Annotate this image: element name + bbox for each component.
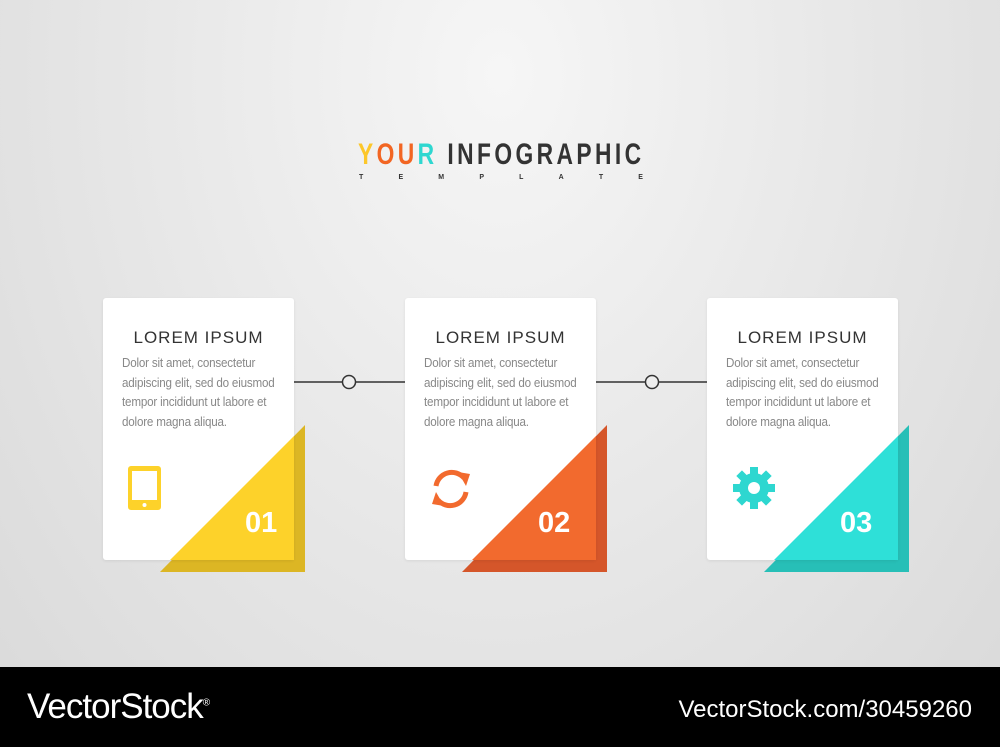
number 02: 02 bbox=[538, 507, 570, 539]
panel: 01: Dolor sit amet, consectetur bbox=[122, 356, 255, 370]
panel: 02: tempor incididunt ut labore et bbox=[424, 395, 568, 409]
number 03: 03 bbox=[840, 507, 872, 539]
subtitle: A bbox=[559, 174, 564, 181]
panel: 02: dolore magna aliqua. bbox=[424, 414, 529, 428]
panel: 02: Dolor sit amet, consectetur bbox=[424, 356, 557, 370]
footer: VectorStock.com/30459260 bbox=[678, 696, 972, 723]
footer: VectorStock® bbox=[27, 687, 209, 726]
panel: 03: tempor incididunt ut labore et bbox=[726, 395, 870, 409]
panel: 03: Dolor sit amet, consectetur bbox=[726, 356, 859, 370]
panel: 01: dolore magna aliqua. bbox=[122, 414, 227, 428]
panel: 03: dolore magna aliqua. bbox=[726, 414, 831, 428]
panel: 01: tempor incididunt ut labore et bbox=[122, 395, 266, 409]
subtitle: E bbox=[398, 174, 403, 181]
panel: 03 bbox=[707, 298, 898, 560]
subtitle: M bbox=[438, 174, 444, 181]
subtitle: L bbox=[519, 174, 523, 181]
panel: 01: adipiscing elit, sed do eiusmod bbox=[122, 376, 275, 390]
subtitle: E bbox=[638, 174, 643, 181]
subtitle: P bbox=[479, 174, 484, 181]
title: YOUR INFOGRAPHIC bbox=[358, 138, 645, 171]
panel: 02 bbox=[405, 298, 596, 560]
panel: 02: LOREM IPSUM bbox=[435, 328, 566, 347]
icon: tablet bbox=[128, 466, 161, 510]
panel: 01 bbox=[103, 298, 294, 560]
panel: 03: adipiscing elit, sed do eiusmod bbox=[726, 376, 879, 390]
panel: 02: adipiscing elit, sed do eiusmod bbox=[424, 376, 577, 390]
panel: 03: LOREM IPSUM bbox=[737, 328, 868, 347]
footer bbox=[0, 667, 1000, 747]
subtitle: T bbox=[599, 174, 603, 181]
number 01: 01 bbox=[245, 507, 277, 539]
subtitle bbox=[359, 174, 643, 181]
icon: gear bbox=[733, 467, 775, 509]
icon: refresh bbox=[432, 470, 470, 508]
subtitle: T bbox=[359, 174, 363, 181]
panel: 01: LOREM IPSUM bbox=[133, 328, 264, 347]
